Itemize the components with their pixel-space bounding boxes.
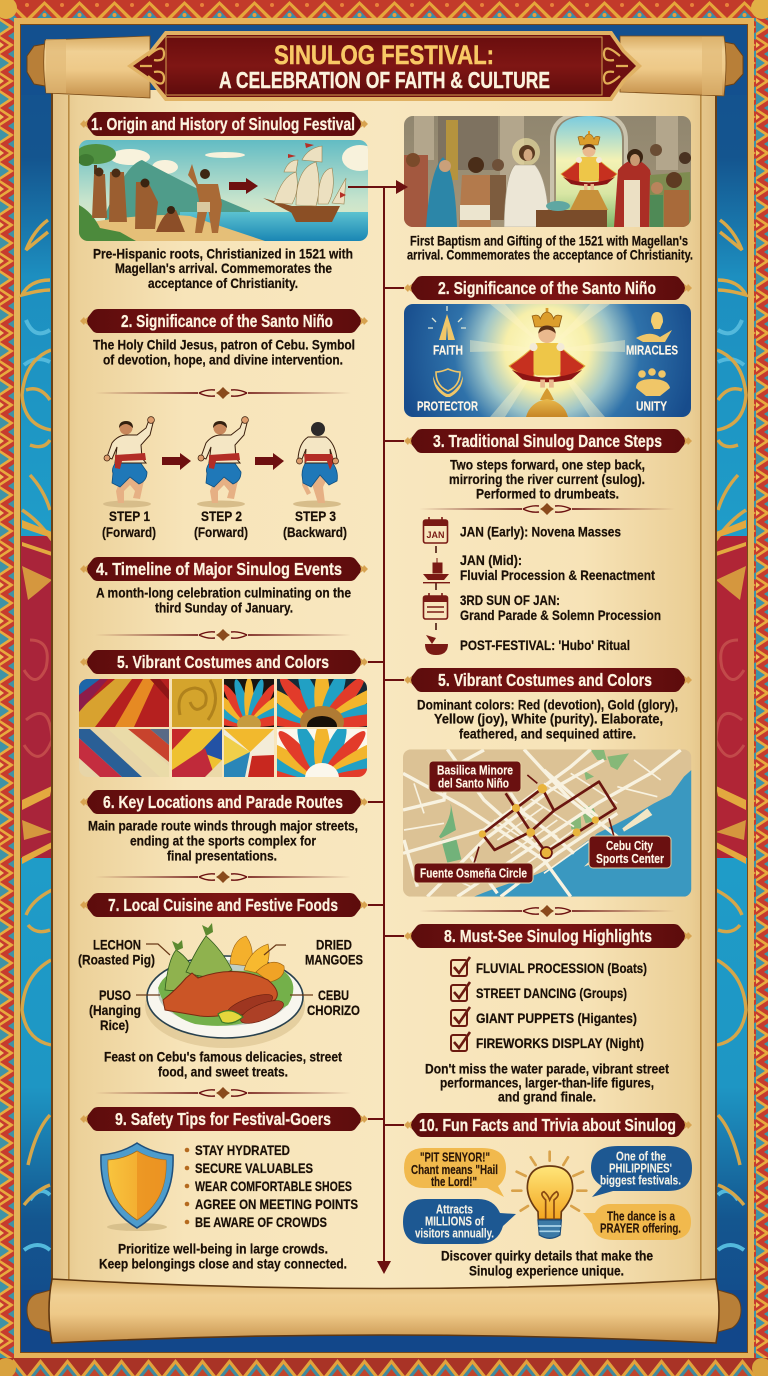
- event: hubo ritual: POST-FESTIVAL: 'Hubo' Ritual: [460, 637, 630, 653]
- icon: miracles: MIRACLES: [626, 342, 678, 358]
- heading 2: [80, 309, 368, 333]
- bubble: Philippines: biggest festivals.: [600, 1172, 681, 1188]
- body text: [96, 584, 351, 616]
- blue symbolic panel: [404, 304, 691, 417]
- heading 6: 6. Key Locations and Parade Routes: [103, 792, 343, 812]
- body text: Prioritize well-being in large crowds.: [118, 1240, 328, 1256]
- panel: costumes, left: [79, 650, 368, 777]
- map label: Sports Center: Cebu City: [606, 838, 654, 853]
- body text: and grand finale.: [498, 1088, 596, 1104]
- bubble: Prayer offering: PRAYER offering.: [600, 1220, 681, 1236]
- body text: [425, 1060, 669, 1104]
- body text: A month-long celebration culminating on the: [96, 584, 351, 600]
- map label: Fuente Osmena: [414, 863, 533, 883]
- bubble: Millions: visitors annually.: [415, 1226, 494, 1240]
- food labels and leader lines: CEBU: [318, 987, 349, 1003]
- title banner: [127, 31, 642, 101]
- icon: faith: FAITH: [433, 342, 463, 358]
- heading 2 right: 2. Significance of the Santo Niño: [438, 278, 656, 298]
- heading 1: [80, 112, 368, 136]
- central timeline connector with arrows: [348, 180, 408, 1274]
- body text: Magellan's arrival. Commemorates the: [115, 260, 332, 276]
- food labels and leader lines: [78, 936, 363, 1033]
- body text: food, and sweet treats.: [158, 1064, 288, 1080]
- dance steps illustration: [102, 417, 347, 540]
- costume photo mosaic: [79, 679, 367, 777]
- panel: significance of the Santo Nino, left: [80, 309, 368, 368]
- tips list: STAY HYDRATED: [195, 1142, 290, 1158]
- food labels and leader lines: (Hanging: [89, 1002, 141, 1018]
- checklist: FIREWORKS DISPLAY (Night): [476, 1035, 644, 1051]
- body text: Dominant colors: Red (devotion), Gold (glory),: [417, 696, 678, 712]
- body text: Discover quirky details that make the: [441, 1248, 653, 1264]
- event: novena masses: [424, 517, 621, 543]
- body text: final presentations.: [167, 848, 277, 864]
- panel: dance steps text, right: [404, 429, 692, 502]
- body text: [88, 818, 358, 864]
- heading 10: 10. Fun Facts and Trivia about Sinulog: [419, 1115, 676, 1135]
- event: novena masses: JAN (Early): Novena Masses: [460, 524, 621, 540]
- bubble: Millions: MILLIONS of: [425, 1214, 484, 1228]
- arrow: [162, 453, 191, 470]
- bubble: Philippines: [591, 1146, 692, 1197]
- body text: ending at the sports complex for: [130, 832, 316, 848]
- body text: [99, 1240, 347, 1272]
- body text: [441, 1248, 653, 1278]
- body text: performances, larger-than-life figures,: [440, 1074, 654, 1090]
- body text: Don't miss the water parade, vibrant street: [425, 1060, 669, 1076]
- body text: First Baptism and Gifting of the 1521 with Magellan's: [410, 232, 688, 248]
- heading 6: [80, 790, 368, 814]
- tips list: SECURE VALUABLES: [195, 1160, 313, 1176]
- heading 2 right: [404, 276, 692, 300]
- body text: Pre-Hispanic roots, Christianized in 1521 with: [93, 246, 353, 262]
- step 3: (Backward): [283, 524, 347, 540]
- body text: acceptance of Christianity.: [148, 275, 298, 291]
- bubble: Millions: [403, 1199, 516, 1244]
- body text: [93, 336, 355, 368]
- top scroll roll right: [620, 36, 743, 96]
- map label: Sports Center: [589, 836, 671, 868]
- body text: Performed to drumbeats.: [476, 486, 619, 502]
- step 1: [102, 417, 156, 540]
- step 2: STEP 2: [201, 508, 242, 524]
- body text: [417, 696, 678, 742]
- body text: [104, 1048, 342, 1080]
- bubble: Pit Senyor: [404, 1148, 506, 1197]
- food labels and leader lines: CHORIZO: [307, 1002, 360, 1018]
- step 2: [194, 417, 248, 540]
- panel: costumes, right: [404, 668, 692, 742]
- body text: feathered, and sequined attire.: [459, 726, 636, 742]
- heading 9: 9. Safety Tips for Festival-Goers: [115, 1109, 331, 1129]
- map label: Basilica: del Santo Niño: [438, 776, 509, 790]
- arrow: [255, 453, 284, 470]
- body text: Main parade route winds through major streets,: [88, 818, 358, 834]
- bubble: Pit Senyor: the Lord!": [431, 1174, 477, 1189]
- icon: faith: [428, 306, 466, 358]
- heading 10: [404, 1113, 692, 1137]
- step 2: (Forward): [194, 524, 248, 540]
- body text: of devotion, hope, and divine intervention.: [103, 352, 343, 368]
- panel: timeline, left: [80, 557, 368, 616]
- bubble: Millions: Attracts: [436, 1202, 473, 1216]
- heading 3: [404, 429, 692, 453]
- bubble: Pit Senyor: Chant means "Hail: [411, 1162, 498, 1177]
- body text: [449, 456, 645, 502]
- body text: [93, 246, 353, 291]
- panel: must-see highlights: [404, 924, 692, 1104]
- map label: Fuente Osmena: Fuente Osmeña Circle: [420, 866, 527, 880]
- checklist: GIANT PUPPETS (Higantes): [476, 1010, 637, 1026]
- icon: unity: [636, 368, 670, 414]
- step 3: STEP 3: [295, 508, 336, 524]
- food labels and leader lines: (Roasted Pig): [78, 952, 155, 968]
- body text: Yellow (joy), White (purity). Elaborate,: [434, 710, 663, 726]
- event: fluvial procession: Fluvial Procession & Reenactment: [460, 567, 655, 583]
- heading 2: 2. Significance of the Santo Niño: [121, 311, 333, 331]
- body text: mirroring the river current (sulog).: [449, 471, 645, 487]
- heading 5: 5. Vibrant Costumes and Colors: [117, 652, 329, 672]
- event: fluvial procession: [423, 546, 655, 630]
- tips list: WEAR COMFORTABLE SHOES: [195, 1178, 352, 1194]
- checklist: FLUVIAL PROCESSION (Boats): [476, 960, 647, 976]
- bubble: Prayer offering: [583, 1204, 691, 1240]
- icon: protector: [417, 369, 478, 414]
- food plate illustration: [145, 923, 305, 1048]
- step 1: (Forward): [102, 524, 156, 540]
- parchment scroll body: [51, 90, 717, 1300]
- bottom scroll roll: [27, 1279, 741, 1343]
- step 3: [283, 422, 347, 540]
- panel: fun facts: [403, 1113, 692, 1278]
- map label: Sports Center: Sports Center: [596, 851, 664, 866]
- event: grand parade: Grand Parade & Solemn Procession: [460, 607, 661, 623]
- body text: Two steps forward, one step back,: [450, 456, 645, 472]
- body text: [407, 232, 693, 262]
- timeline list, right: [423, 517, 661, 655]
- tips list: AGREE ON MEETING POINTS: [195, 1196, 358, 1212]
- title text: [219, 40, 550, 93]
- food labels and leader lines: LECHON: [93, 936, 141, 952]
- title text: SINULOG FESTIVAL:: [274, 40, 494, 70]
- bubble: Pit Senyor: "PIT SENYOR!": [420, 1150, 490, 1164]
- food labels and leader lines: MANGOES: [305, 952, 363, 968]
- heading 7: [80, 893, 368, 917]
- event: grand parade: [424, 592, 661, 623]
- heading 4: 4. Timeline of Major Sinulog Events: [96, 559, 342, 579]
- heading 1: 1. Origin and History of Sinulog Festival: [91, 114, 355, 134]
- body text: The Holy Child Jesus, patron of Cebu. Symbol: [93, 336, 355, 352]
- heading 8: 8. Must-See Sinulog Highlights: [444, 926, 652, 946]
- icon: miracles: [626, 312, 678, 358]
- icon: protector: PROTECTOR: [417, 398, 478, 414]
- body text: Feast on Cebu's famous delicacies, street: [104, 1048, 342, 1064]
- top scroll roll left: [27, 36, 150, 98]
- heading 5: [80, 650, 368, 674]
- heading 8: [404, 924, 692, 948]
- icon: shield: [101, 1143, 173, 1231]
- event: fluvial procession: JAN (Mid):: [460, 552, 522, 568]
- icon: light bulb: [512, 1152, 586, 1238]
- body text: arrival. Commemorates the acceptance of Christianity.: [407, 246, 693, 262]
- heading 3: 3. Traditional Sinulog Dance Steps: [433, 431, 662, 451]
- checklist: STREET DANCING (Groups): [476, 985, 627, 1001]
- step 1: STEP 1: [109, 508, 150, 524]
- heading 5 right: 5. Vibrant Costumes and Colors: [438, 670, 652, 690]
- food labels and leader lines: DRIED: [316, 936, 352, 952]
- checklist: [451, 957, 647, 1051]
- tips list: [185, 1142, 358, 1230]
- event: grand parade: 3RD SUN OF JAN:: [460, 592, 560, 608]
- body text: Sinulog experience unique.: [469, 1262, 624, 1278]
- body text: Keep belongings close and stay connected.: [99, 1256, 347, 1272]
- panel: cuisine: [78, 893, 368, 1080]
- illustration: first baptism and gifting: [404, 113, 691, 227]
- bubble: Prayer offering: The dance is a: [607, 1208, 676, 1224]
- map label: Basilica: [429, 761, 521, 792]
- panel: significance of the Santo Nino, right: [404, 276, 692, 417]
- map label: Basilica: Basilica Minore: [437, 762, 513, 778]
- event: hubo ritual: [425, 635, 630, 655]
- tips list: BE AWARE OF CROWDS: [195, 1214, 327, 1230]
- title text: A CELEBRATION OF FAITH & CULTURE: [219, 67, 550, 93]
- panel: first baptism: [404, 113, 693, 262]
- icon: unity: UNITY: [636, 398, 667, 414]
- food labels and leader lines: Rice): [100, 1017, 129, 1033]
- food labels and leader lines: PUSO: [99, 987, 131, 1003]
- illustration: natives and Magellan's ship: [76, 140, 378, 241]
- panel: safety tips: [80, 1107, 368, 1272]
- event: novena masses: JAN: [426, 530, 444, 540]
- bubble: Philippines: One of the: [616, 1148, 666, 1164]
- body text: third Sunday of January.: [155, 600, 293, 616]
- map: parade route: [403, 749, 691, 897]
- heading 7: 7. Local Cuisine and Festive Foods: [108, 895, 338, 915]
- panel: parade routes, left: [80, 790, 368, 864]
- panel: origin and history: [76, 112, 378, 291]
- bubble: Philippines: PHILIPPINES': [609, 1160, 672, 1176]
